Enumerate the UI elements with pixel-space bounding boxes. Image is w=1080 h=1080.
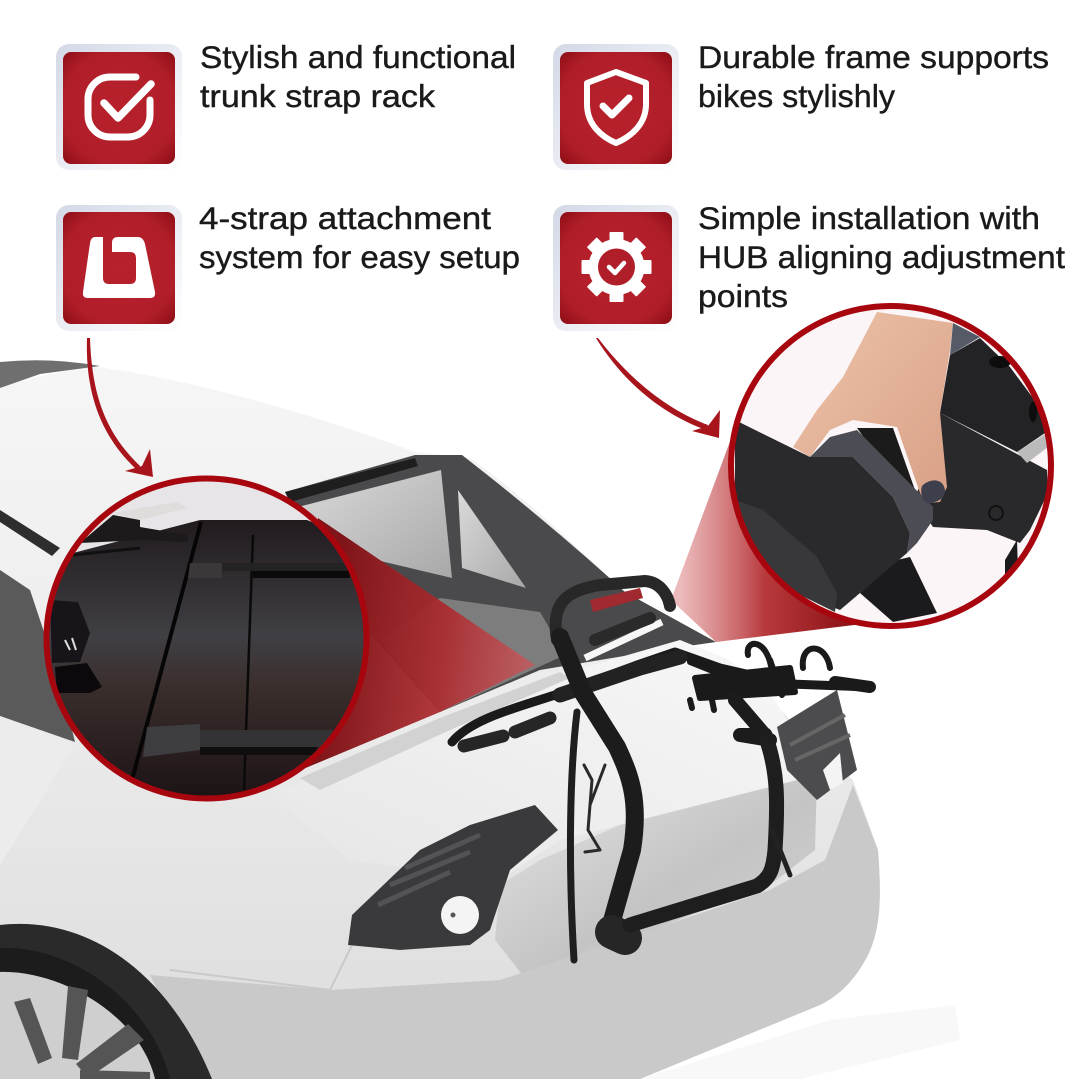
- feature text: points: [698, 278, 788, 314]
- car photo: [0, 360, 960, 1079]
- feature text: bikes stylishly: [698, 78, 895, 114]
- feature text: system for easy setup: [199, 239, 520, 275]
- feature text: 4-strap attachment: [199, 200, 491, 236]
- feature: simple installation: [553, 200, 1065, 331]
- strap detail circle: [46, 478, 367, 799]
- feature: stylish and functional: [56, 39, 516, 170]
- feature text: [200, 39, 516, 114]
- feature: durable frame: [553, 39, 1049, 170]
- red zoom cone: strap detail: [296, 518, 535, 772]
- arrow: to hub detail: [596, 338, 720, 438]
- feature text: Durable frame supports: [698, 39, 1049, 75]
- icon: strap bracket: [56, 205, 182, 331]
- feature text: [698, 39, 1049, 114]
- feature: 4-strap attachment: [56, 200, 520, 331]
- red zoom cone: hub detail: [671, 420, 862, 642]
- hub detail circle: [731, 306, 1051, 626]
- bike rack: [452, 581, 870, 960]
- arrow: to strap detail: [87, 338, 153, 477]
- feature text: trunk strap rack: [200, 78, 435, 114]
- feature text: Stylish and functional: [200, 39, 516, 75]
- feature text: [698, 200, 1065, 314]
- feature text: HUB aligning adjustment: [698, 239, 1065, 275]
- icon: gear: [553, 205, 679, 331]
- feature text: [199, 200, 520, 275]
- icon: shield: [553, 44, 679, 170]
- rack brand tag: [590, 588, 643, 612]
- feature text: Simple installation with: [698, 200, 1040, 236]
- icon: check box: [56, 44, 182, 170]
